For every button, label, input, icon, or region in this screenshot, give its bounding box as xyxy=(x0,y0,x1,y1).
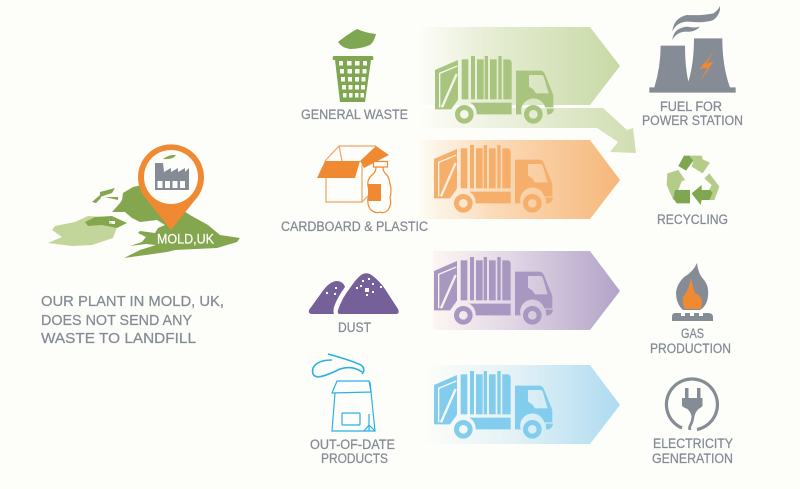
map: Great Britain xyxy=(92,185,240,258)
arrow: dust xyxy=(433,251,620,330)
label: RECYCLING xyxy=(657,212,728,227)
input: out-of-date products xyxy=(310,354,395,466)
label xyxy=(642,99,743,128)
label: FUEL FOR xyxy=(660,99,722,114)
description text: OUR PLANT IN MOLD, UK, xyxy=(41,293,224,310)
icon: gas flame xyxy=(672,263,713,321)
map: Ireland xyxy=(48,216,117,246)
label: ELECTRICITY xyxy=(653,436,733,451)
description text: WASTE TO LANDFILL xyxy=(41,330,196,347)
input: cardboard and plastic xyxy=(281,146,428,234)
label: GENERATION xyxy=(652,451,733,466)
label: DUST xyxy=(338,320,371,335)
map label: MOLD,UK xyxy=(157,232,214,246)
truck: green xyxy=(435,56,554,124)
output: gas production xyxy=(650,263,731,356)
arrow: cardboard and plastic xyxy=(420,140,620,219)
input: general waste xyxy=(301,29,408,122)
label: POWER STATION xyxy=(642,113,743,128)
label xyxy=(652,436,733,466)
icon: box and bottle xyxy=(317,146,391,213)
icon: food package xyxy=(332,381,375,431)
arrow: out-of-date products xyxy=(425,365,620,444)
truck: orange xyxy=(434,145,553,213)
label: CARDBOARD & PLASTIC xyxy=(281,219,428,234)
label: GAS xyxy=(681,326,704,341)
truck: purple xyxy=(434,257,553,325)
map: Northern Ireland xyxy=(85,216,127,228)
label: PRODUCTION xyxy=(650,341,731,356)
icon: recycling arrows xyxy=(667,156,719,205)
arrow: general waste xyxy=(420,27,620,105)
icon: cooling towers xyxy=(649,6,736,93)
output: fuel for power station xyxy=(642,6,743,128)
output: electricity generation xyxy=(652,379,733,466)
label xyxy=(650,326,731,356)
icon: waste bin xyxy=(333,29,376,102)
icon: factory xyxy=(155,155,189,190)
description text: DOES NOT SEND ANY xyxy=(41,312,192,329)
output: recycling xyxy=(657,156,728,227)
icon: smell swirl xyxy=(313,354,364,377)
label: PRODUCTS xyxy=(321,451,388,466)
description text xyxy=(41,293,224,347)
label xyxy=(310,437,395,466)
label: OUT-OF-DATE xyxy=(310,437,395,452)
label: GENERAL WASTE xyxy=(301,107,408,122)
arrow: branch to recycling xyxy=(420,108,636,153)
input: dust xyxy=(309,273,399,335)
icon: dust piles xyxy=(309,273,399,314)
map pin xyxy=(138,144,204,230)
panel: plant location xyxy=(41,144,240,347)
truck: blue xyxy=(434,371,553,439)
icon: plug xyxy=(666,379,717,430)
